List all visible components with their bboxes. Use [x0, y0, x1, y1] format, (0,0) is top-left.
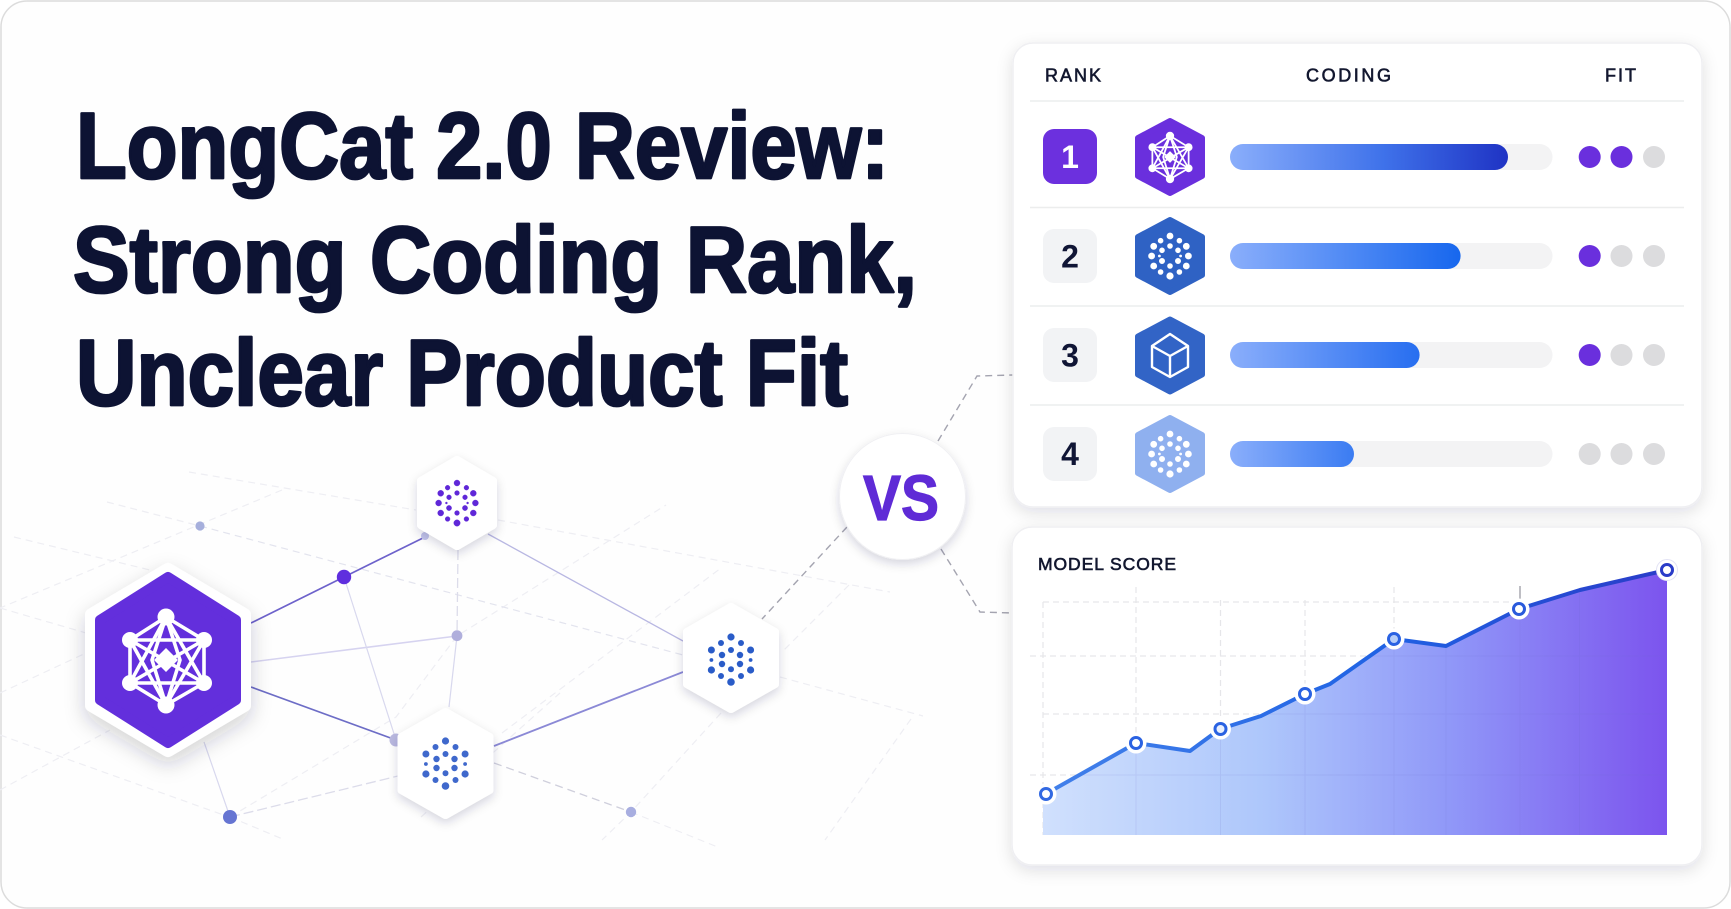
row 1 — [1043, 121, 1665, 193]
table header: RANK — [1045, 66, 1101, 86]
chart heading: MODEL SCORE — [1038, 554, 1176, 574]
row 3 — [1043, 320, 1665, 392]
data points — [1036, 560, 1678, 804]
row 2: 2 — [1061, 238, 1079, 274]
panel: model score chart — [1012, 527, 1702, 865]
hex node: bottom blue dots — [402, 712, 490, 815]
area chart — [1030, 560, 1678, 835]
row 3: 3 — [1061, 338, 1079, 374]
VS badge — [840, 434, 966, 560]
row 2 — [1043, 220, 1665, 292]
panel: ranking table — [1013, 43, 1702, 507]
connector: VS to panels — [762, 375, 1013, 619]
hex node: top purple dots — [421, 460, 493, 546]
title — [73, 93, 917, 425]
hex node: right blue dots — [687, 607, 775, 709]
table header — [1045, 66, 1636, 86]
table header: CODING — [1306, 66, 1391, 86]
hex node: primary purple — [92, 570, 244, 750]
VS badge: VS — [863, 462, 939, 534]
network background grid — [0, 472, 923, 848]
row 1: 1 — [1061, 139, 1079, 175]
title: Strong Coding Rank, — [73, 207, 917, 312]
row 4 — [1043, 418, 1665, 490]
network connections — [204, 534, 683, 817]
title: LongCat 2.0 Review: — [76, 93, 889, 198]
table header: FIT — [1605, 66, 1636, 86]
row 4: 4 — [1061, 436, 1079, 472]
title: Unclear Product Fit — [76, 320, 848, 425]
network nodes — [195, 521, 636, 824]
